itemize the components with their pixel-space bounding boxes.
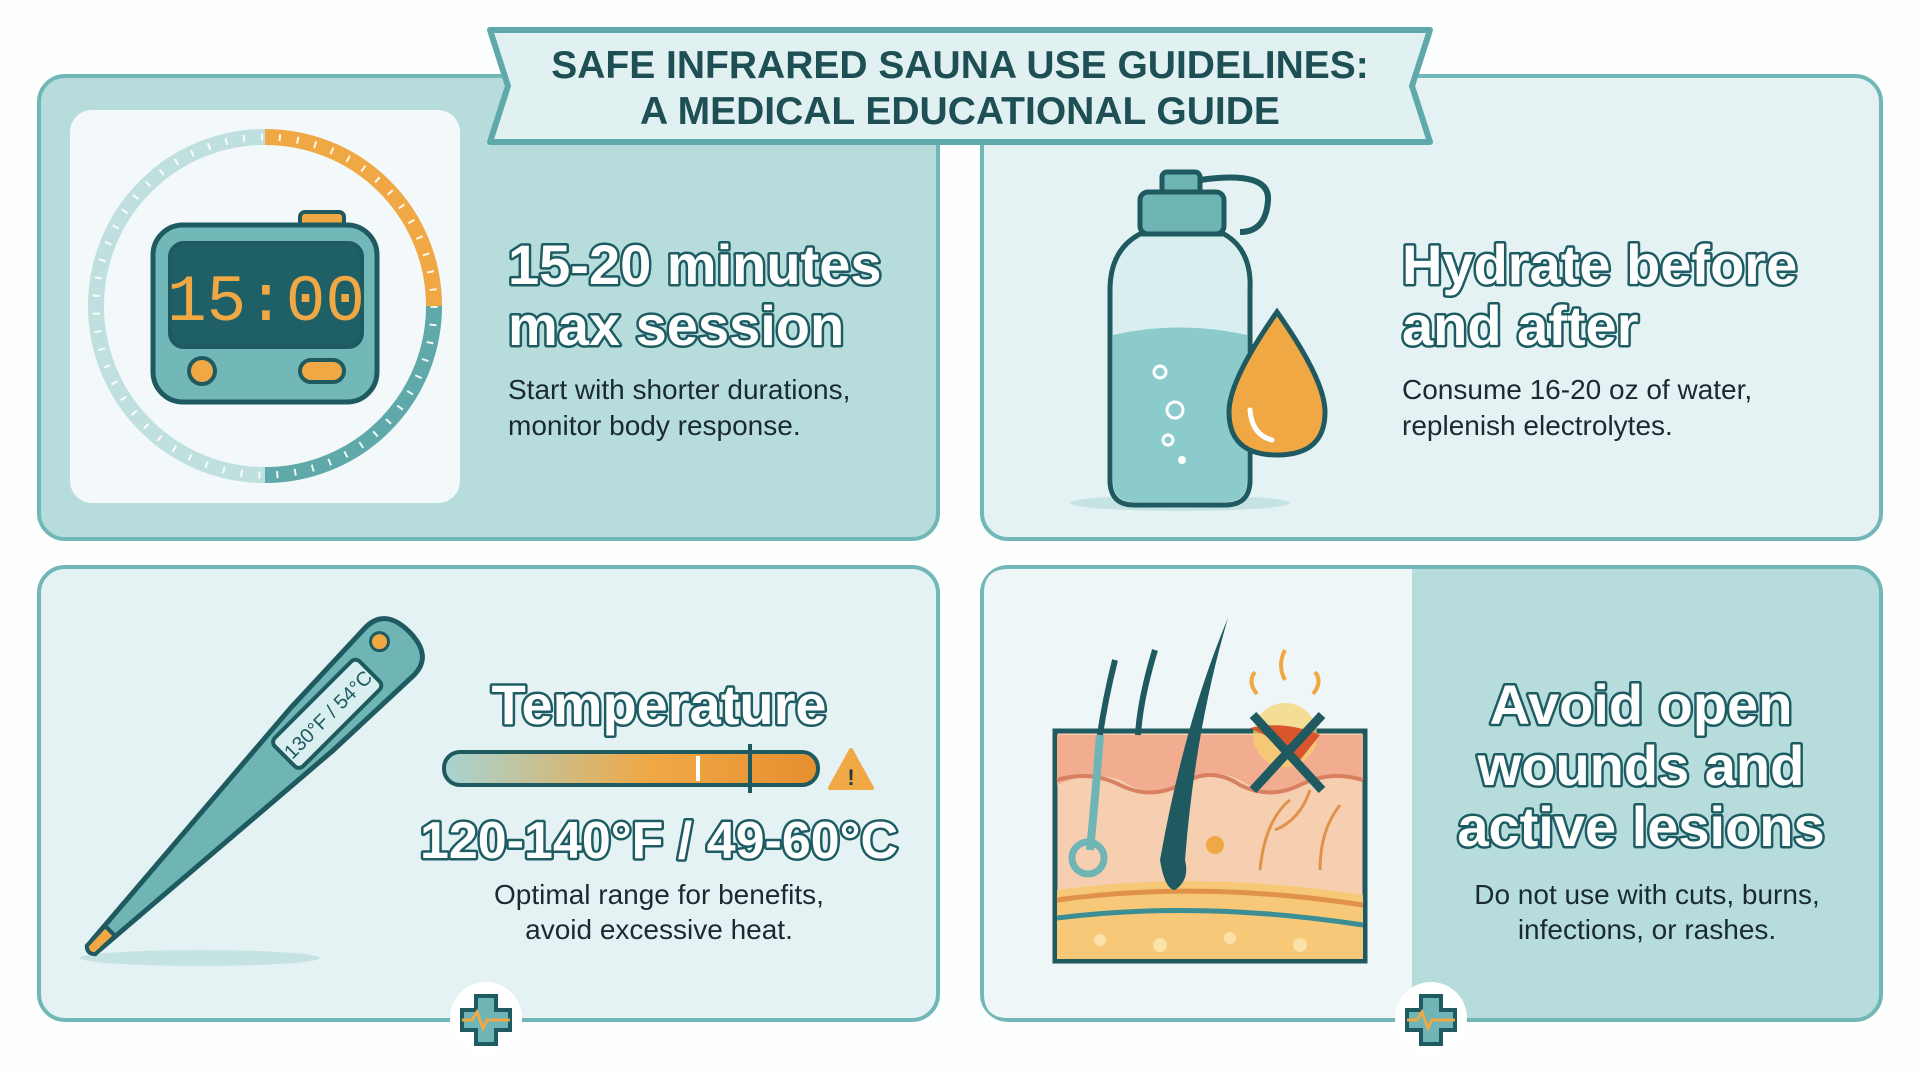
- body text: wounds: infections, or rashes.: [1518, 914, 1776, 945]
- body text: temp: Optimal range for benefits,: [494, 879, 824, 910]
- icon: plus badge: [450, 982, 522, 1054]
- icon: skin diagram: [1055, 618, 1365, 961]
- heading: 15-20 minutes: max session: [508, 294, 844, 357]
- icon: thermometer: [65, 608, 433, 976]
- body text: hydrate: Consume 16-20 oz of water,: [1402, 374, 1752, 405]
- body text: wounds: [1474, 879, 1820, 945]
- heading: temp range: 120-140°F / 49-60°C: [420, 812, 898, 870]
- heading: hydrate: and after: [1402, 294, 1638, 357]
- panel: hydration: [982, 76, 1881, 539]
- body text: session: monitor body response.: [508, 410, 801, 441]
- heading: wounds: Avoid open: [1490, 673, 1792, 736]
- body text: temp: [494, 879, 824, 945]
- icon: drop: [1229, 312, 1325, 455]
- icon: thermometer: 130°F / 54°C: [280, 667, 377, 764]
- icon: warning: !: [847, 765, 855, 790]
- title banner: [490, 30, 1430, 142]
- body text: session: [508, 374, 850, 441]
- heading: wounds: [1457, 673, 1825, 858]
- body text: hydrate: [1402, 374, 1752, 441]
- timer icon box: [70, 110, 460, 503]
- body text: session: Start with shorter durations,: [508, 374, 850, 405]
- body text: hydrate: replenish electrolytes.: [1402, 410, 1673, 441]
- heading: 15-20 minutes: 15-20 minutes: [508, 233, 882, 296]
- title banner: SAFE INFRARED SAUNA USE GUIDELINES:: [551, 44, 1369, 87]
- panel: temperature: [39, 567, 938, 1054]
- body text: temp: avoid excessive heat.: [525, 914, 793, 945]
- heading: 15-20 minutes: [508, 233, 882, 357]
- icon: warning: [830, 750, 872, 790]
- panel: session time: [39, 76, 938, 539]
- title banner: A MEDICAL EDUCATIONAL GUIDE: [640, 90, 1280, 133]
- heading: temperature: Temperature: [491, 673, 827, 736]
- panel: wounds: [982, 567, 1881, 1054]
- chart: temperature bar: [444, 744, 818, 793]
- timer icon box: 15:00: [167, 265, 365, 340]
- body text: wounds: Do not use with cuts, burns,: [1474, 879, 1820, 910]
- heading: wounds: wounds and: [1477, 734, 1804, 797]
- heading: wounds: active lesions: [1457, 795, 1825, 858]
- heading: hydrate: Hydrate before: [1402, 233, 1797, 296]
- heading: hydrate: [1402, 233, 1797, 357]
- icon: water bottle: [1070, 172, 1290, 511]
- icon: plus badge: [1395, 982, 1467, 1054]
